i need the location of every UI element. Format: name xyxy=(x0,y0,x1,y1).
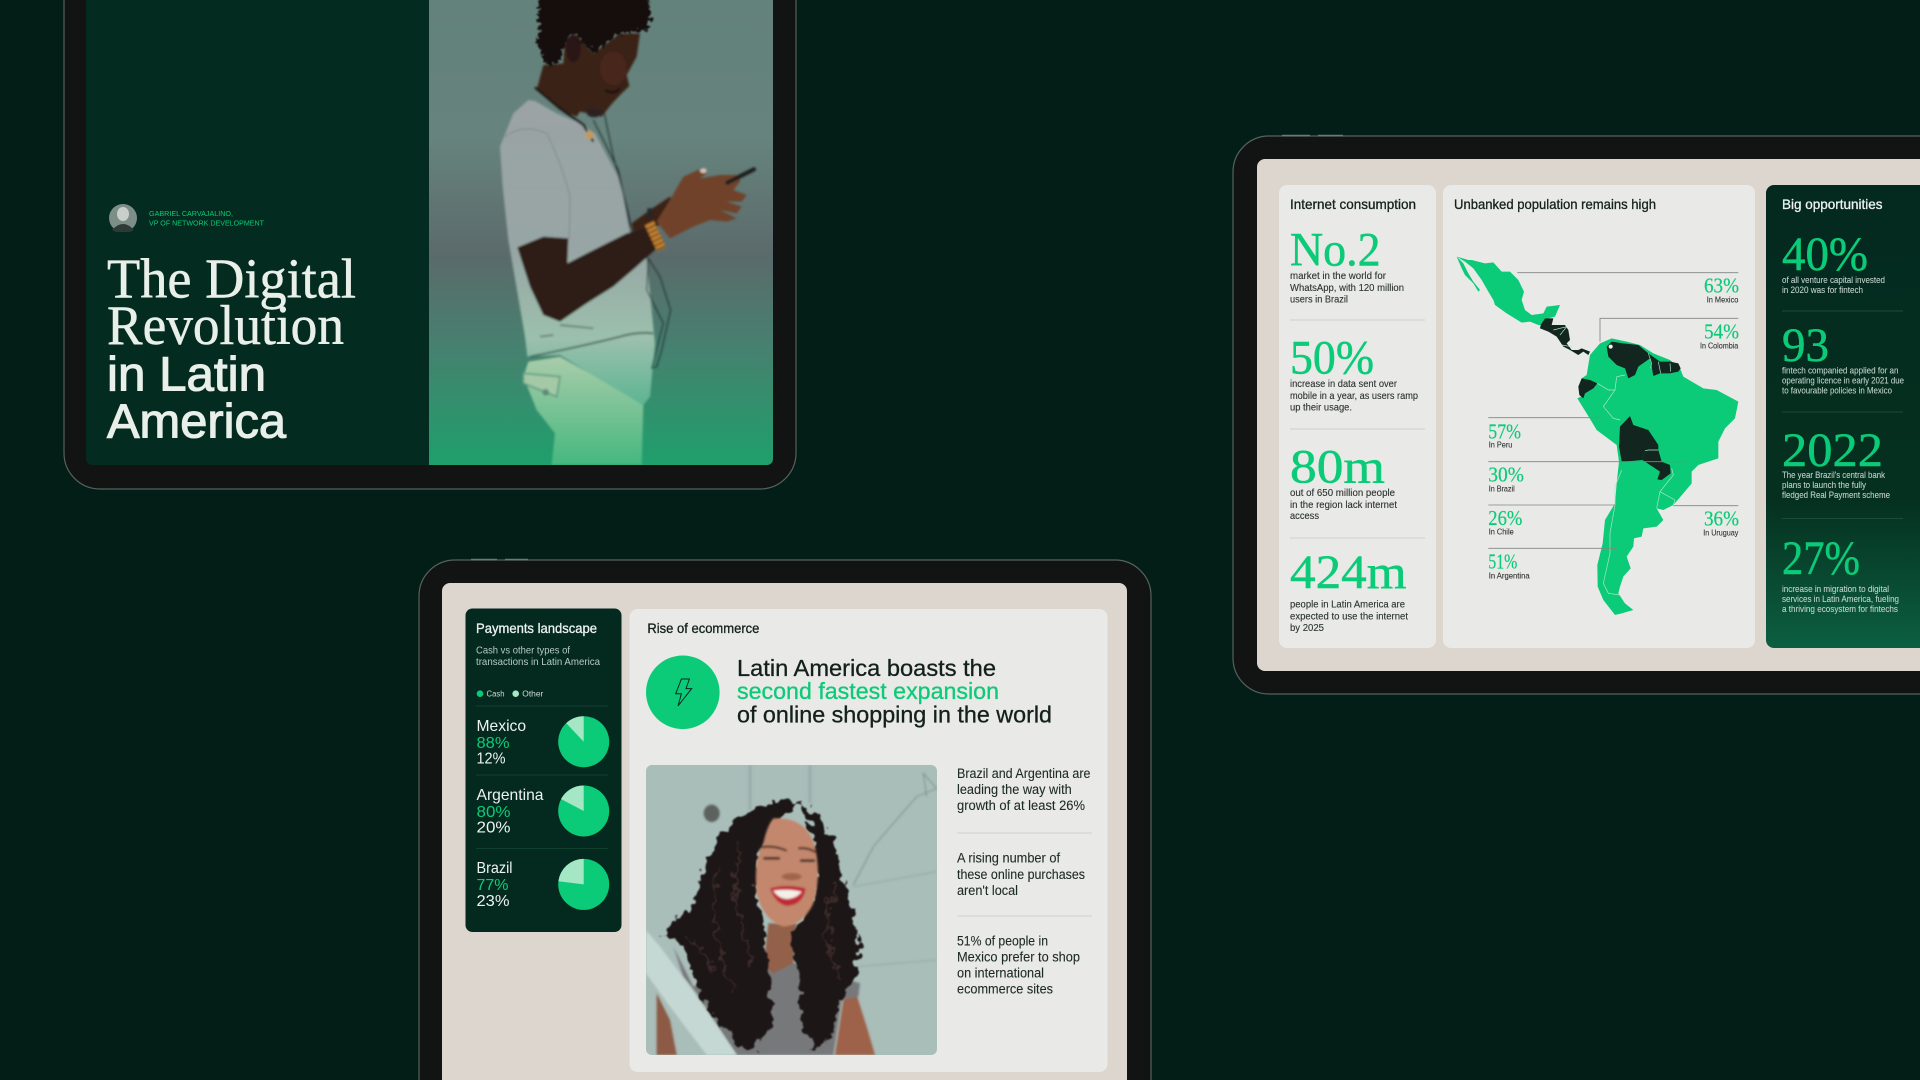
label: Uruguay: 36% xyxy=(1704,506,1739,530)
stat: 27%: increase in migration to digital xyxy=(1782,584,1889,594)
heading: Internet consumption xyxy=(1290,196,1416,212)
earphone wires xyxy=(593,112,671,368)
stat: No.2 xyxy=(1290,223,1404,305)
panel: payments landscape xyxy=(466,608,622,932)
neck xyxy=(763,923,797,973)
stat: 93: fintech companied applied for an xyxy=(1782,366,1898,376)
author avatar xyxy=(109,204,137,232)
row: Brazil: 23% xyxy=(476,893,510,910)
face xyxy=(756,818,818,927)
hand xyxy=(657,168,747,238)
panel: unbanked population map xyxy=(1443,185,1755,648)
t-shirt xyxy=(500,100,655,405)
author byline xyxy=(149,211,265,228)
stat: No.2: No.2 xyxy=(1290,223,1381,276)
stat: 2022: 2022 xyxy=(1782,424,1883,477)
text block: online purchases: A rising number of xyxy=(957,851,1060,866)
cover title: The Digital xyxy=(107,248,356,310)
panel: internet consumption xyxy=(1279,185,1436,648)
stat: No.2: WhatsApp, with 120 million xyxy=(1290,282,1404,294)
cover dark panel xyxy=(86,0,429,465)
stat: 50% xyxy=(1290,332,1418,414)
stat: 80m: 80m xyxy=(1290,440,1385,494)
row: Brazil: Brazil xyxy=(476,860,512,877)
stat: 424m: expected to use the internet xyxy=(1290,610,1408,622)
label: Uruguay: In Uruguay xyxy=(1703,528,1738,537)
stat: 27% xyxy=(1782,532,1899,614)
row: Mexico: Mexico xyxy=(476,718,526,735)
row: Brazil xyxy=(476,859,609,910)
arm xyxy=(517,228,657,322)
icon: lightning bolt xyxy=(646,656,720,729)
long curly hair xyxy=(663,802,860,1047)
label: Argentina: 51% xyxy=(1488,549,1517,573)
tablet screen xyxy=(442,583,1127,1080)
stat: 2022: plans to launch the fully xyxy=(1782,480,1866,490)
row: Argentina: 80% xyxy=(476,804,510,821)
text block: online purchases: aren't local xyxy=(957,883,1018,898)
label: Peru xyxy=(1488,419,1521,450)
cover title xyxy=(107,248,356,449)
pie chart: Brazil xyxy=(558,859,609,910)
cover title: in Latin xyxy=(107,349,266,402)
subheading: transactions in Latin America xyxy=(476,656,600,668)
stat: No.2: market in the world for xyxy=(1290,270,1386,282)
callout headline: second fastest expansion xyxy=(737,678,999,704)
label: Colombia xyxy=(1700,320,1739,350)
stat: 27%: 27% xyxy=(1782,532,1860,585)
pie chart: Argentina xyxy=(558,785,609,836)
stat: 2022 xyxy=(1782,424,1890,500)
stat: 424m xyxy=(1290,546,1408,634)
curly hair xyxy=(537,0,652,65)
tablet frame xyxy=(419,560,1151,1080)
photo: smiling woman xyxy=(646,765,937,1055)
text block: Mexico shoppers: on international xyxy=(957,965,1044,980)
stat: 50%: 50% xyxy=(1290,332,1374,384)
stat: 50%: increase in data sent over xyxy=(1290,378,1397,390)
stat: 93: to favourable policies in Mexico xyxy=(1782,385,1892,395)
map of Latin America xyxy=(1457,257,1738,615)
panel: rise of ecommerce xyxy=(630,609,1108,1072)
tablet: payments and ecommerce page xyxy=(419,560,1151,1080)
text block: Mexico shoppers: ecommerce sites xyxy=(957,982,1053,996)
row: Mexico xyxy=(476,716,609,768)
label: Colombia: In Colombia xyxy=(1700,341,1739,350)
label: Colombia: 54% xyxy=(1704,320,1739,344)
text block: Mexico shoppers xyxy=(957,934,1080,996)
stat: 2022: The year Brazil's central bank xyxy=(1782,470,1885,480)
stat: 93 xyxy=(1782,319,1904,395)
heading: Rise of ecommerce xyxy=(647,620,760,636)
row: Brazil: 77% xyxy=(476,877,508,894)
legend: Cash xyxy=(486,690,504,698)
stat: 50%: up their usage. xyxy=(1290,402,1352,414)
label: Mexico: In Mexico xyxy=(1707,296,1739,305)
pie chart: Mexico xyxy=(558,716,609,767)
panel: big opportunities xyxy=(1766,185,1920,648)
tablet screen xyxy=(1257,159,1920,671)
row: Argentina: Argentina xyxy=(476,787,544,804)
stat: 80m xyxy=(1290,440,1397,522)
tablet frame xyxy=(1233,136,1920,694)
stat: 80m: out of 650 million people xyxy=(1290,487,1395,499)
cover title: America xyxy=(107,396,286,449)
label: Brazil: In Brazil xyxy=(1489,484,1515,493)
row: Mexico: 88% xyxy=(476,735,510,752)
row: Argentina: 20% xyxy=(476,820,510,837)
label: Argentina: In Argentina xyxy=(1489,571,1530,580)
text block: Brazil and Argentina: leading the way with xyxy=(957,782,1072,797)
subheading: Cash vs other types of xyxy=(476,644,570,656)
stat: 80m: access xyxy=(1290,510,1319,522)
text block: Brazil and Argentina xyxy=(957,766,1090,813)
text block: Mexico shoppers: Mexico prefer to shop xyxy=(957,949,1080,964)
text block: online purchases: these online purchases xyxy=(957,867,1085,882)
shorts xyxy=(523,357,643,465)
stat: 40%: of all venture capital invested xyxy=(1782,275,1885,285)
callout headline xyxy=(737,655,1052,727)
stat: 50%: mobile in a year, as users ramp xyxy=(1290,390,1418,402)
row: Mexico: 12% xyxy=(476,751,506,768)
railing xyxy=(646,930,737,1055)
bracelet xyxy=(649,222,662,249)
stat: 424m: people in Latin America are xyxy=(1290,599,1405,611)
callout headline: Latin America boasts the xyxy=(737,655,996,681)
label: Brazil: 30% xyxy=(1488,463,1524,487)
stat: 93: operating licence in early 2021 due xyxy=(1782,375,1904,385)
necklace xyxy=(535,87,593,142)
cover title: Revolution xyxy=(107,295,344,357)
label: Chile: 26% xyxy=(1488,506,1522,530)
stat: 40% xyxy=(1782,228,1885,295)
stat: 27%: services in Latin America, fueling xyxy=(1782,594,1899,604)
cover photo: man with phone xyxy=(429,0,773,465)
shirt xyxy=(673,947,860,1055)
legend: Other xyxy=(522,690,544,698)
text block: online purchases xyxy=(957,851,1085,898)
arms xyxy=(657,993,677,1055)
tablet frame xyxy=(64,0,796,489)
row: Argentina xyxy=(476,785,609,837)
label: Mexico: 63% xyxy=(1704,274,1739,298)
stat: 424m: by 2025 xyxy=(1290,622,1324,634)
stat: 93: 93 xyxy=(1782,319,1829,372)
author byline: VP OF NETWORK DEVELOPMENT xyxy=(149,221,265,228)
stat: 40%: in 2020 was for fintech xyxy=(1782,285,1863,295)
heading: Big opportunities xyxy=(1782,196,1882,212)
subheading xyxy=(476,644,600,668)
label: Peru: 57% xyxy=(1488,419,1521,443)
text block: Brazil and Argentina: growth of at least 26% xyxy=(957,798,1085,813)
text block: Mexico shoppers: 51% of people in xyxy=(957,934,1048,948)
stat: 424m: 424m xyxy=(1290,546,1406,599)
neck and face xyxy=(537,33,640,117)
label: Chile: In Chile xyxy=(1489,528,1514,537)
callout headline: of online shopping in the world xyxy=(737,701,1052,727)
heading: Payments landscape xyxy=(476,620,597,636)
heading: Unbanked population remains high xyxy=(1454,196,1656,212)
stat: 40%: 40% xyxy=(1782,228,1868,281)
label: Peru: In Peru xyxy=(1489,441,1512,450)
stat: 80m: in the region lack internet xyxy=(1290,499,1397,511)
stat: 2022: fledged Real Payment scheme xyxy=(1782,490,1890,500)
stat: 27%: a thriving ecosystem for fintechs xyxy=(1782,604,1898,614)
legend xyxy=(477,690,544,698)
tablet: statistics page xyxy=(1233,136,1920,694)
text block: Brazil and Argentina: Brazil and Argentina are xyxy=(957,766,1090,781)
tablet: cover page xyxy=(64,0,796,489)
phone xyxy=(727,169,754,183)
stat: No.2: users in Brazil xyxy=(1290,293,1348,305)
author byline: GABRIEL CARVAJALINO, xyxy=(149,211,233,218)
